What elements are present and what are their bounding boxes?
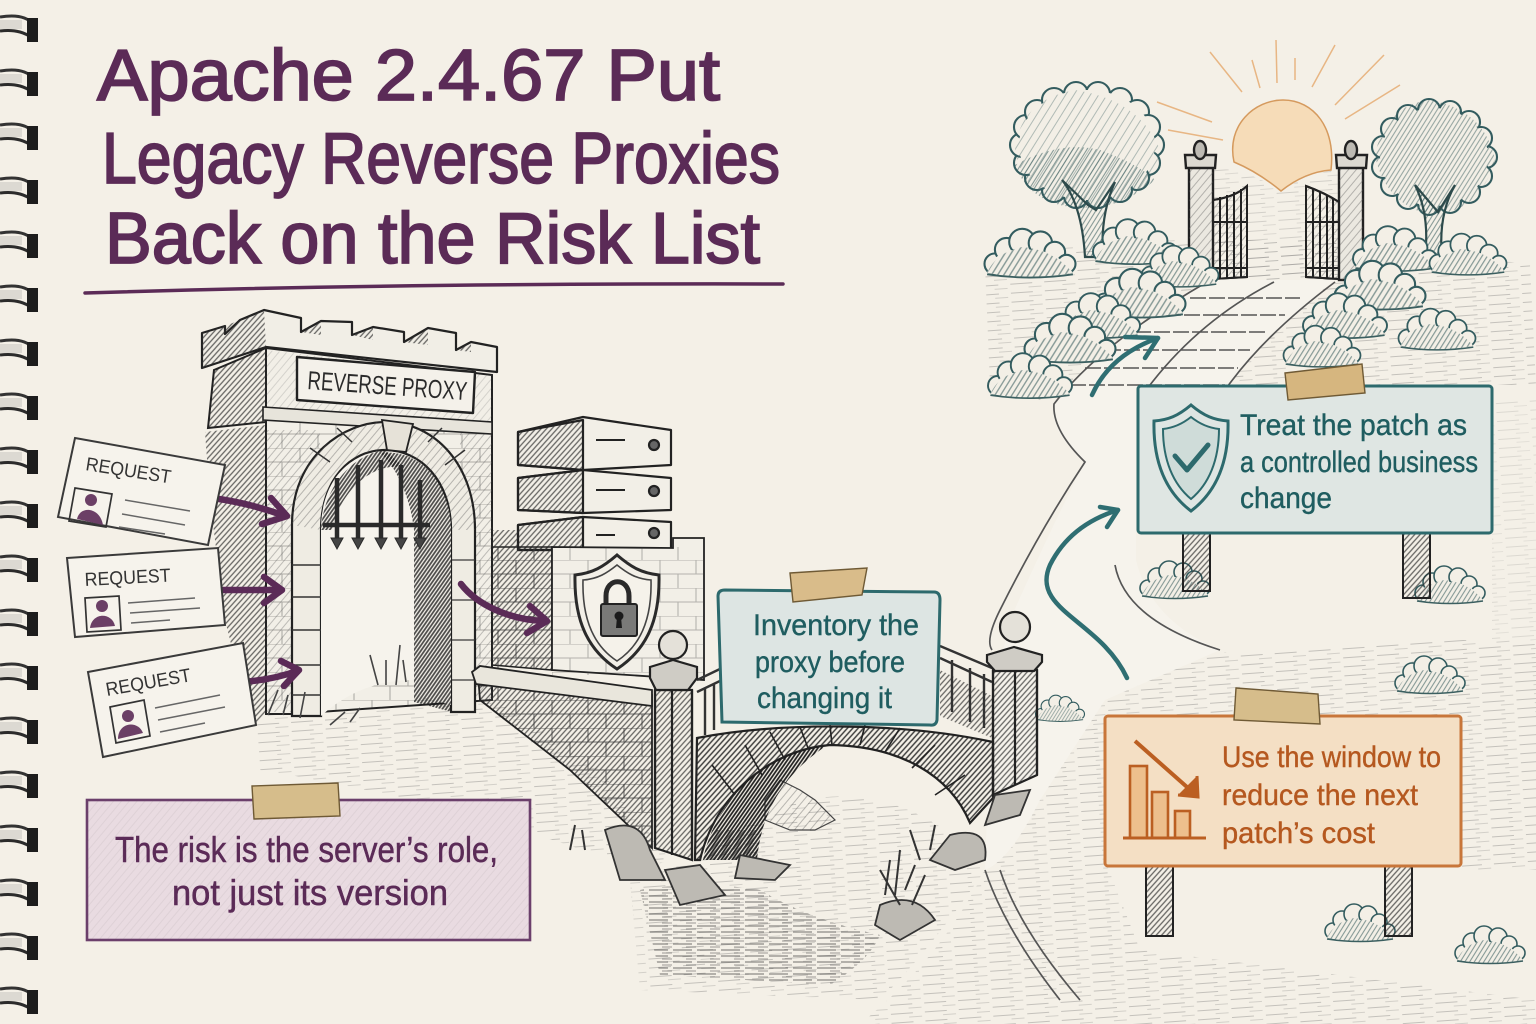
- castle gatehouse tower: [202, 310, 497, 727]
- far bank bushes: [765, 780, 835, 830]
- server 3: [518, 517, 671, 550]
- sign: controlled business change: change: [1240, 482, 1332, 515]
- tower shaded side: [205, 425, 266, 727]
- bridge body: [695, 726, 993, 860]
- request card 3: [88, 643, 256, 757]
- stone path to garden gate: [985, 280, 1335, 1000]
- title: [97, 36, 780, 279]
- sign: reduce next patch cost: reduce the next: [1222, 779, 1419, 812]
- title underline: [85, 284, 783, 293]
- request card 2: REQUEST: [84, 566, 171, 591]
- callout: inventory: [718, 568, 940, 725]
- request card 1: [58, 438, 225, 545]
- icon: padlock shield: [575, 555, 659, 669]
- arrow: request 2 to gate: [216, 577, 282, 603]
- spiral binding: [0, 16, 38, 1014]
- path edge lines: [985, 282, 1335, 1000]
- tower left face upper: [208, 348, 266, 428]
- server stack: [518, 417, 671, 550]
- low wall: [478, 675, 652, 848]
- sign text: Use the window to: [1222, 741, 1441, 774]
- garden shrubs: [984, 219, 1525, 963]
- reeds: [570, 825, 935, 905]
- tower crenellations: [202, 310, 497, 372]
- pillar left: [1185, 141, 1216, 280]
- reverse proxy sign: [297, 357, 475, 413]
- arrow: gate to shield: [461, 584, 547, 633]
- stone arch: [292, 422, 475, 716]
- title: Apache 2.4.67 Put: [97, 36, 720, 116]
- server 2: [518, 470, 671, 513]
- pillar right: [1336, 141, 1367, 280]
- purple flow arrows: [212, 498, 547, 686]
- right hillside ground: [860, 168, 1536, 1024]
- teal arrow to gate: [1092, 337, 1158, 395]
- ground beneath the gate: [255, 690, 670, 870]
- wall front face: [552, 538, 704, 680]
- left gate leaf: [1213, 186, 1247, 279]
- sign tape: [1285, 364, 1365, 400]
- callout: server role: [87, 783, 530, 940]
- sign: controlled business change: a controlled business: [1240, 446, 1478, 479]
- icon: shield check: [1154, 405, 1228, 511]
- request card 1: REQUEST: [84, 454, 173, 488]
- teal arrow to patch sign: [1046, 507, 1127, 678]
- sun with rays: [1157, 40, 1400, 191]
- request card 2: [67, 548, 225, 637]
- right gate leaf: [1306, 186, 1339, 279]
- arrow: request 1 to gate: [212, 498, 287, 524]
- bridge right post: [987, 612, 1042, 795]
- crenellation shadows: [202, 310, 471, 368]
- trunk right: [1415, 185, 1455, 257]
- paving lines: [1070, 298, 1300, 385]
- portcullis: [323, 460, 430, 549]
- arch inner shadow: [380, 453, 452, 712]
- tower front face: [266, 348, 492, 714]
- canopy left scallops: [1010, 82, 1164, 208]
- grass at gate: [268, 645, 406, 725]
- bridge left post: [650, 631, 697, 860]
- reverse proxy sign: REVERSE PROXY: [307, 365, 468, 406]
- callout: inventory: Inventory the: [753, 609, 919, 642]
- stone bridge: [570, 612, 1042, 1000]
- callout: inventory: changing it: [757, 682, 893, 715]
- sign: reduce next patch cost: patch’s cost: [1222, 817, 1376, 850]
- title: Back on the Risk List: [105, 199, 760, 279]
- sign board: [1138, 386, 1492, 533]
- callout: server role: not just its version: [172, 872, 448, 913]
- title: Legacy Reverse Proxies: [102, 119, 780, 199]
- gate opening: [321, 452, 451, 716]
- bridge under-arch shadow: [703, 746, 826, 860]
- server 1: [518, 417, 671, 470]
- sign board: [1105, 716, 1461, 866]
- callout: server role: The risk is the server’s role,: [115, 829, 498, 870]
- tree left: [1010, 82, 1164, 257]
- canopy right scallops: [1372, 99, 1497, 215]
- sign text: Treat the patch as: [1240, 409, 1467, 442]
- tree right: [1372, 99, 1497, 257]
- sign: reduce next patch cost: [1105, 688, 1461, 936]
- callout: inventory: proxy before: [755, 646, 905, 679]
- river: [630, 796, 985, 1000]
- wall shaded face: [492, 547, 552, 670]
- bridge railings: [697, 646, 992, 738]
- request card 3: REQUEST: [104, 665, 193, 701]
- sign posts: [1183, 533, 1430, 598]
- rocks: [605, 790, 1030, 940]
- icon: falling bar chart: [1123, 741, 1206, 838]
- sign posts: [1146, 866, 1412, 936]
- arrow: request 3 to gate: [242, 661, 299, 686]
- sign tape: [1234, 688, 1320, 724]
- garden gate: [1185, 141, 1367, 280]
- stone wall with shield: [472, 530, 704, 848]
- sign: controlled business change: [1138, 364, 1492, 598]
- trunk left: [1062, 180, 1115, 257]
